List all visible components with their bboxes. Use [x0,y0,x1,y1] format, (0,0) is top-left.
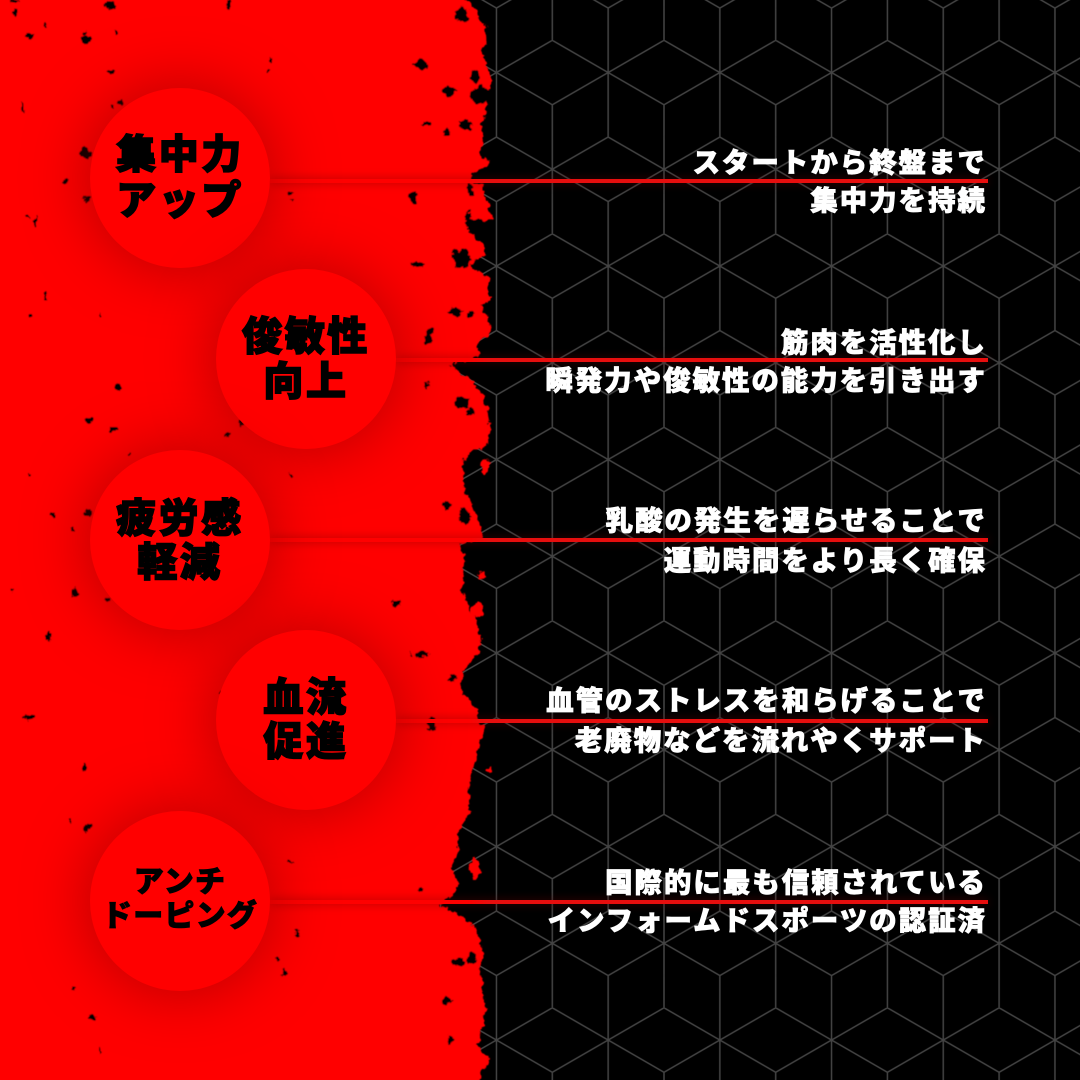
item: 俊敏性向上 [182,236,990,482]
badge label line 1: アンチ [134,866,226,899]
description text [545,327,987,396]
description line 1: 筋肉を活性化し [781,327,987,358]
circle badge [216,269,396,449]
badge label line 1: 血流 [263,676,349,720]
description line 2: 運動時間をより長く確保 [664,545,987,576]
badge label line 1: 俊敏性 [242,315,370,359]
badge label line 2: 向上 [263,360,349,404]
connector line [270,179,988,183]
description line 1: 血管のストレスを和らげることで [546,685,987,716]
description text [546,685,987,756]
description line 1: 国際的に最も信頼されている [605,867,987,898]
connector line [396,719,988,723]
description text [606,505,987,576]
badge label line 2: 軽減 [137,541,223,585]
description line 2: 老廃物などを流れやくサポート [575,725,987,756]
description text [548,867,987,936]
item: 集中力アップ [56,54,990,304]
description line 2: 瞬発力や俊敏性の能力を引き出す [545,365,987,396]
connector line [270,900,988,904]
circle badge [90,450,270,630]
connector line [270,538,988,542]
connector line [396,358,988,362]
circle badge [90,811,270,991]
description line 1: 乳酸の発生を遅らせることで [606,505,987,536]
description line 2: 集中力を持続 [810,185,987,216]
description text [693,147,987,216]
circle badge [90,88,270,268]
badge label line 2: 促進 [263,720,349,764]
circle badge [216,630,396,810]
item: アンチドーピング [56,778,990,1024]
badge label line 2: ドーピング [102,900,258,933]
description line 1: スタートから終盤まで [693,147,987,178]
badge label line 1: 疲労感 [116,497,244,541]
item: 疲労感軽減 [56,416,990,666]
item: 血流促進 [182,596,990,844]
description line 2: インフォームドスポーツの認証済 [548,905,987,936]
badge label line 1: 集中力 [116,133,244,177]
badge label line 2: アップ [116,179,244,223]
